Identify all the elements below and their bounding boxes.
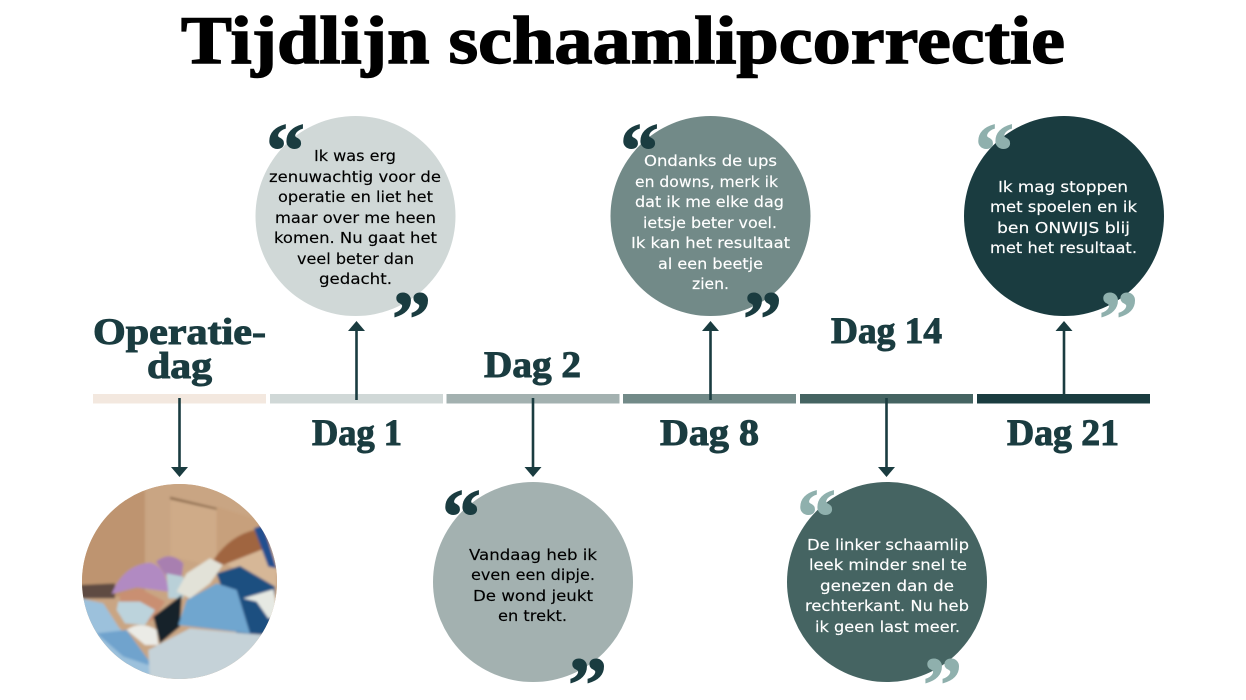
quote bubble: dag 8: ietsje beter voel.: [643, 214, 777, 232]
quote bubble: dag 1: “: [266, 107, 305, 194]
quote bubble: dag 14: leek minder snel te: [809, 556, 967, 574]
quote bubble: dag 1: ”: [392, 275, 431, 362]
quote bubble: dag 1: Ik was erg: [314, 147, 396, 165]
heading: Operatiedag: dag: [147, 346, 213, 387]
quote bubble: dag 14: genezen dan de: [820, 577, 954, 595]
arrow: dag 2 down: [524, 398, 542, 477]
quote bubble: dag 8: ”: [743, 275, 782, 362]
quote bubble: dag 2: De wond jeukt: [473, 587, 593, 605]
title: Tijdlijn schaamlipcorrectie: [181, 2, 1065, 78]
quote bubble: dag 14: ik geen last meer.: [815, 618, 960, 636]
quote bubble: dag 21: ben ONWIJS blij: [997, 219, 1130, 237]
quote bubble: dag 1: gedacht.: [319, 270, 392, 288]
quote bubble: dag 8: en downs, merk ik: [635, 173, 778, 191]
arrow: operatiedag down: [171, 398, 188, 477]
heading: Operatiedag: Operatie-: [93, 312, 266, 353]
quote bubble: dag 1: maar over me heen: [275, 209, 436, 227]
quote bubble: dag 2: Vandaag heb ik: [469, 546, 597, 564]
quote bubble: dag 8: Ik kan het resultaat: [631, 234, 790, 252]
quote bubble: dag 2: en trekt.: [498, 607, 567, 625]
arrow: dag 21 up: [1056, 321, 1072, 400]
quote bubble: dag 1: komen. Nu gaat het: [274, 229, 437, 247]
timeline bar: [93, 394, 1150, 404]
heading: Dag 8: Dag 8: [660, 413, 759, 454]
heading: Dag 1: Dag 1: [312, 413, 402, 454]
quote bubble: dag 8: al een beetje: [658, 255, 763, 273]
quote bubble: dag 2: even een dipje.: [471, 566, 595, 584]
photo: operating room: [82, 484, 277, 679]
quote bubble: dag 21: Ik mag stoppen: [998, 178, 1128, 196]
heading: Dag 14: Dag 14: [831, 311, 942, 352]
quote bubble: dag 21: met spoelen en ik: [990, 198, 1137, 216]
quote bubble: dag 1: operatie en liet het: [278, 188, 433, 206]
quote bubble: dag 21: [964, 107, 1164, 362]
quote bubble: dag 8: Ondanks de ups: [644, 152, 777, 170]
quote bubble: dag 8: [610, 107, 810, 362]
arrow: dag 1 up: [348, 321, 365, 400]
quote bubble: dag 1: zenuwachtig voor de: [269, 168, 441, 186]
heading: Dag 2: Dag 2: [484, 345, 581, 386]
heading: Dag 21: Dag 21: [1007, 413, 1119, 454]
heading: Operatiedag: [93, 312, 266, 387]
quote bubble: dag 8: “: [620, 107, 659, 194]
quote bubble: dag 8: dat ik me elke dag: [635, 193, 784, 211]
arrow: dag 14 down: [878, 398, 895, 477]
quote bubble: dag 21: met het resultaat.: [990, 239, 1137, 257]
quote bubble: dag 14: De linker schaamlip: [807, 536, 969, 554]
quote bubble: dag 1: veel beter dan: [297, 250, 414, 268]
quote bubble: dag 21: ”: [1099, 275, 1138, 362]
quote bubble: dag 2: “: [442, 473, 481, 560]
arrow: dag 8 up: [702, 321, 719, 400]
quote bubble: dag 14: [787, 473, 987, 700]
quote bubble: dag 1: [256, 107, 456, 362]
quote bubble: dag 14: “: [797, 473, 836, 560]
quote bubble: dag 14: rechterkant. Nu heb: [805, 597, 969, 615]
quote bubble: dag 21: “: [975, 107, 1014, 194]
quote bubble: dag 8: zien.: [692, 275, 729, 293]
quote bubble: dag 2: [433, 473, 633, 700]
